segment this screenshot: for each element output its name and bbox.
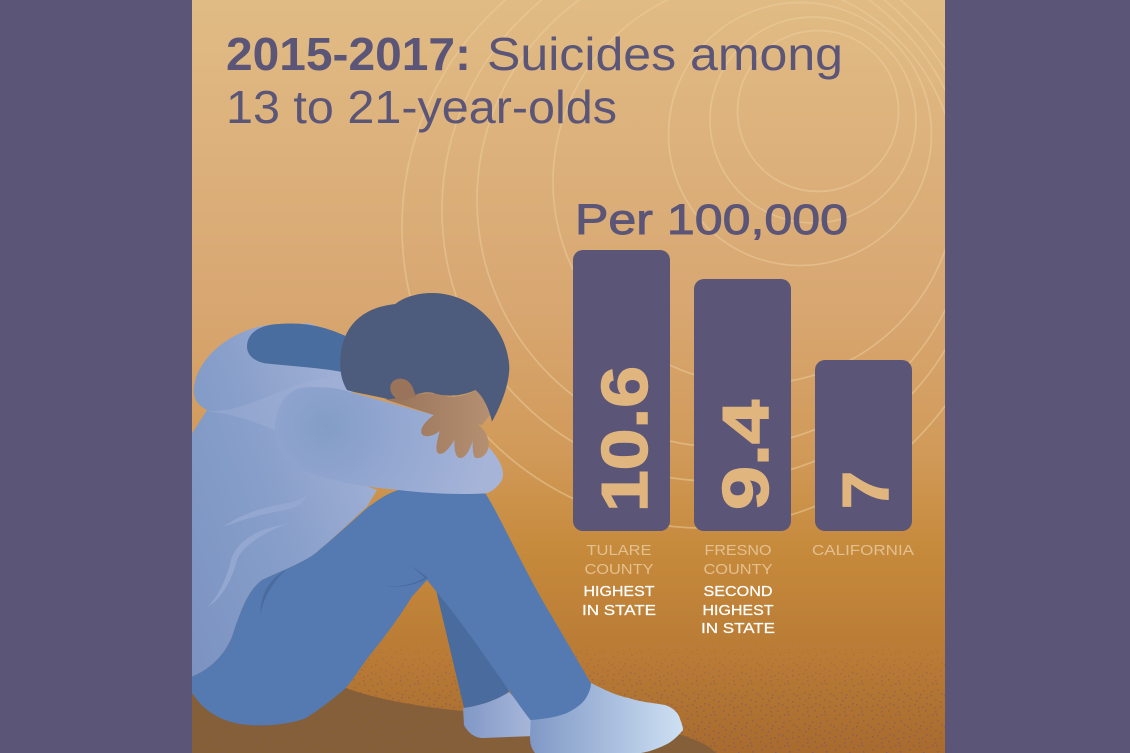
hoodie crease lower (207, 524, 287, 607)
figure: seated person (192, 293, 683, 753)
label: Tulare County: HIGHEST (584, 583, 654, 600)
label: Fresno County: HIGHEST (702, 602, 774, 619)
label: Fresno County: SECOND (704, 583, 773, 600)
label: Tulare County: IN STATE (582, 602, 656, 619)
hoodie sleeve (275, 387, 503, 494)
stippled sand (353, 650, 945, 753)
ground hill (192, 672, 716, 753)
hood lining (247, 324, 347, 372)
background panel (192, 0, 945, 753)
bar: Tulare County: 10.6 (588, 366, 661, 512)
hood fold (210, 400, 270, 428)
hand with fingers (421, 415, 489, 458)
bar chart (573, 250, 912, 531)
back lower leg (436, 590, 509, 708)
title bold years: 2015-2017: (226, 28, 471, 80)
label: California: CALIFORNIA (812, 542, 914, 559)
bar: Fresno County (694, 279, 791, 531)
ear (390, 378, 416, 398)
jeans crease knee (385, 566, 428, 587)
label: Tulare County: TULARE (586, 542, 652, 559)
front shoe (530, 683, 683, 753)
face and forehead (385, 390, 491, 425)
title line two: 13 to 21-year-olds (226, 81, 617, 133)
jeans crease hip (260, 569, 287, 615)
back shoe (463, 692, 535, 738)
arm, head and hand, traced at three-times scale (275, 293, 509, 494)
bar: Tulare County (573, 250, 670, 531)
label: Fresno County: COUNTY (704, 561, 772, 578)
title (226, 28, 843, 133)
bar: California (815, 360, 912, 531)
jeans (192, 490, 591, 728)
bar: California: 7 (829, 471, 902, 509)
hair (340, 293, 509, 422)
label: Tulare County: COUNTY (584, 561, 654, 578)
label: Tulare County (582, 542, 656, 619)
hoodie crease upper (225, 502, 296, 526)
bar: Fresno County: 9.4 (709, 400, 782, 510)
label: Fresno County (701, 542, 775, 637)
hoodie and jeans, traced at three-times scale (192, 323, 591, 728)
label: Fresno County: FRESNO (704, 542, 772, 559)
title line one: Suicides among (487, 28, 843, 80)
concentric rings (402, 0, 1004, 528)
infographic canvas (192, 0, 945, 753)
label: Fresno County: IN STATE (701, 620, 775, 637)
hoodie body (192, 323, 377, 677)
chart heading: Per 100,000 (575, 196, 848, 244)
